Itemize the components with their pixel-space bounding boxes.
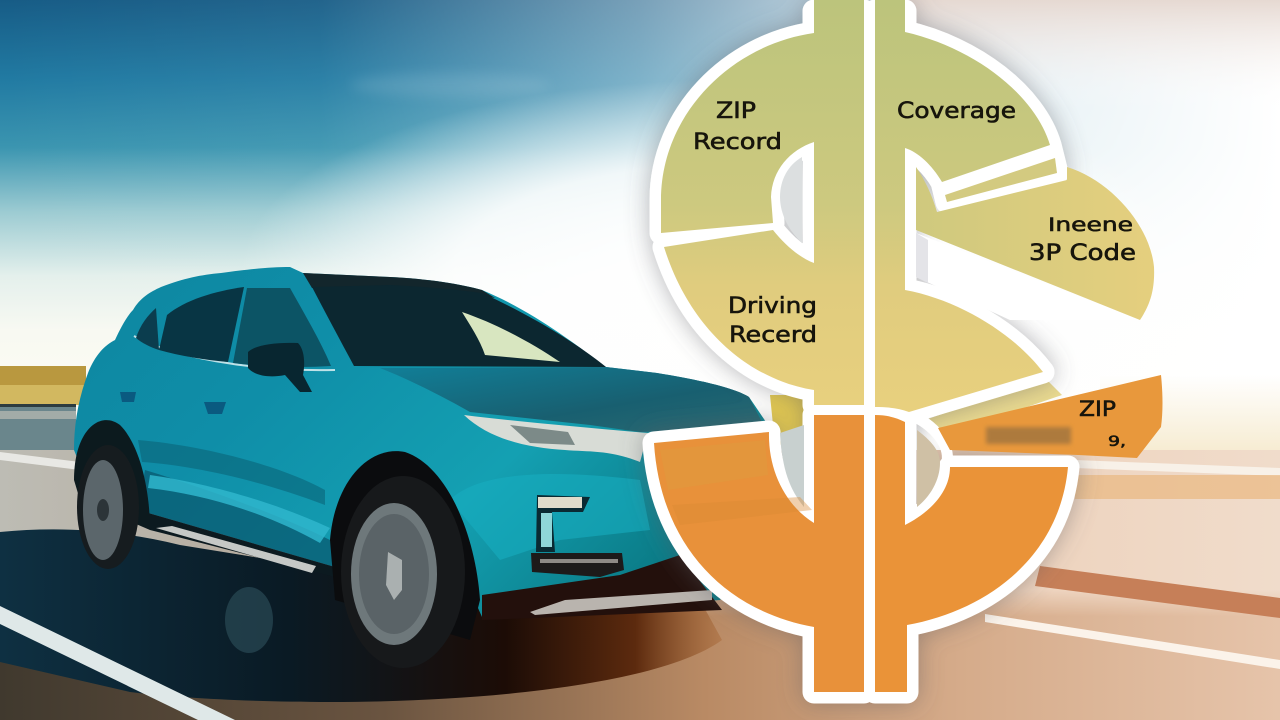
label: orange ZIP bbox=[1079, 397, 1126, 450]
label: ZIP Code wedge text: Ineene bbox=[1048, 214, 1133, 236]
label: ZIP Record: Record bbox=[693, 130, 782, 155]
silver side step bbox=[156, 526, 316, 573]
car body bbox=[74, 267, 800, 617]
front wheel bbox=[341, 476, 465, 668]
headlight bbox=[464, 415, 648, 462]
label: Coverage: Coverage bbox=[897, 99, 1016, 124]
side sill bbox=[138, 510, 335, 577]
blurred label smudge bbox=[986, 427, 1071, 444]
front wheel arch bbox=[330, 451, 480, 640]
grille slat bbox=[540, 559, 618, 563]
headlight inner bbox=[510, 425, 575, 445]
lower door dark bbox=[138, 470, 335, 567]
fender highlight bbox=[450, 474, 650, 560]
label: Driving Record bbox=[728, 294, 817, 348]
windshield bbox=[312, 285, 606, 367]
silver skid plate bbox=[530, 590, 712, 615]
coverage strip bbox=[945, 158, 1057, 202]
white arc by lower right notch bbox=[909, 414, 947, 462]
front side window bbox=[233, 288, 331, 367]
label: ZIP Code wedge text bbox=[1029, 214, 1136, 266]
wing mirror bbox=[248, 343, 312, 392]
label: orange ZIP: ZIP bbox=[1079, 397, 1116, 421]
air vent strip bbox=[541, 513, 552, 547]
orange texture streaks bbox=[660, 440, 812, 525]
rear wheel bbox=[77, 445, 139, 569]
label: ZIP Record bbox=[693, 99, 782, 155]
segment: orange ZIP wedge bbox=[938, 375, 1162, 458]
door shade bbox=[138, 440, 325, 505]
car hood bbox=[380, 367, 765, 432]
label: Driving Record: Driving bbox=[728, 294, 817, 319]
rear quarter window bbox=[136, 308, 159, 350]
fog lamp light bbox=[538, 497, 582, 508]
segment: ZIP Record and Driving Record bbox=[661, 0, 864, 405]
lower bumper bbox=[482, 555, 722, 620]
car: teal SUV bbox=[74, 267, 800, 668]
rear side window bbox=[159, 287, 244, 362]
segment: ZIP Code wedge bbox=[916, 167, 1154, 320]
cut-out windows bbox=[780, 157, 1140, 507]
windshield light area bbox=[462, 312, 560, 362]
segment: bottom left orange bbox=[654, 415, 864, 692]
dark roof panel bbox=[303, 273, 495, 298]
label: ZIP Record: ZIP bbox=[716, 99, 756, 124]
body highlight bbox=[148, 475, 330, 543]
segment: bottom right orange bbox=[875, 415, 1068, 692]
white outline layer bbox=[654, 11, 1068, 692]
fog lamp frame bbox=[536, 495, 590, 552]
window chrome bbox=[134, 336, 335, 370]
backdrop behind dollar sign cut-outs bbox=[770, 378, 1062, 445]
segment: Coverage and lower right lobe bbox=[875, 0, 1050, 412]
dollar sign infographic bbox=[654, 0, 1162, 692]
label: orange ZIP: 9, bbox=[1108, 434, 1126, 450]
rear wheel arch bbox=[74, 420, 150, 530]
lower grille bbox=[531, 553, 624, 577]
door handles bbox=[120, 392, 226, 414]
label: Driving Record: Recerd bbox=[729, 323, 817, 348]
label: ZIP Code wedge text: 3P Code bbox=[1029, 241, 1136, 266]
